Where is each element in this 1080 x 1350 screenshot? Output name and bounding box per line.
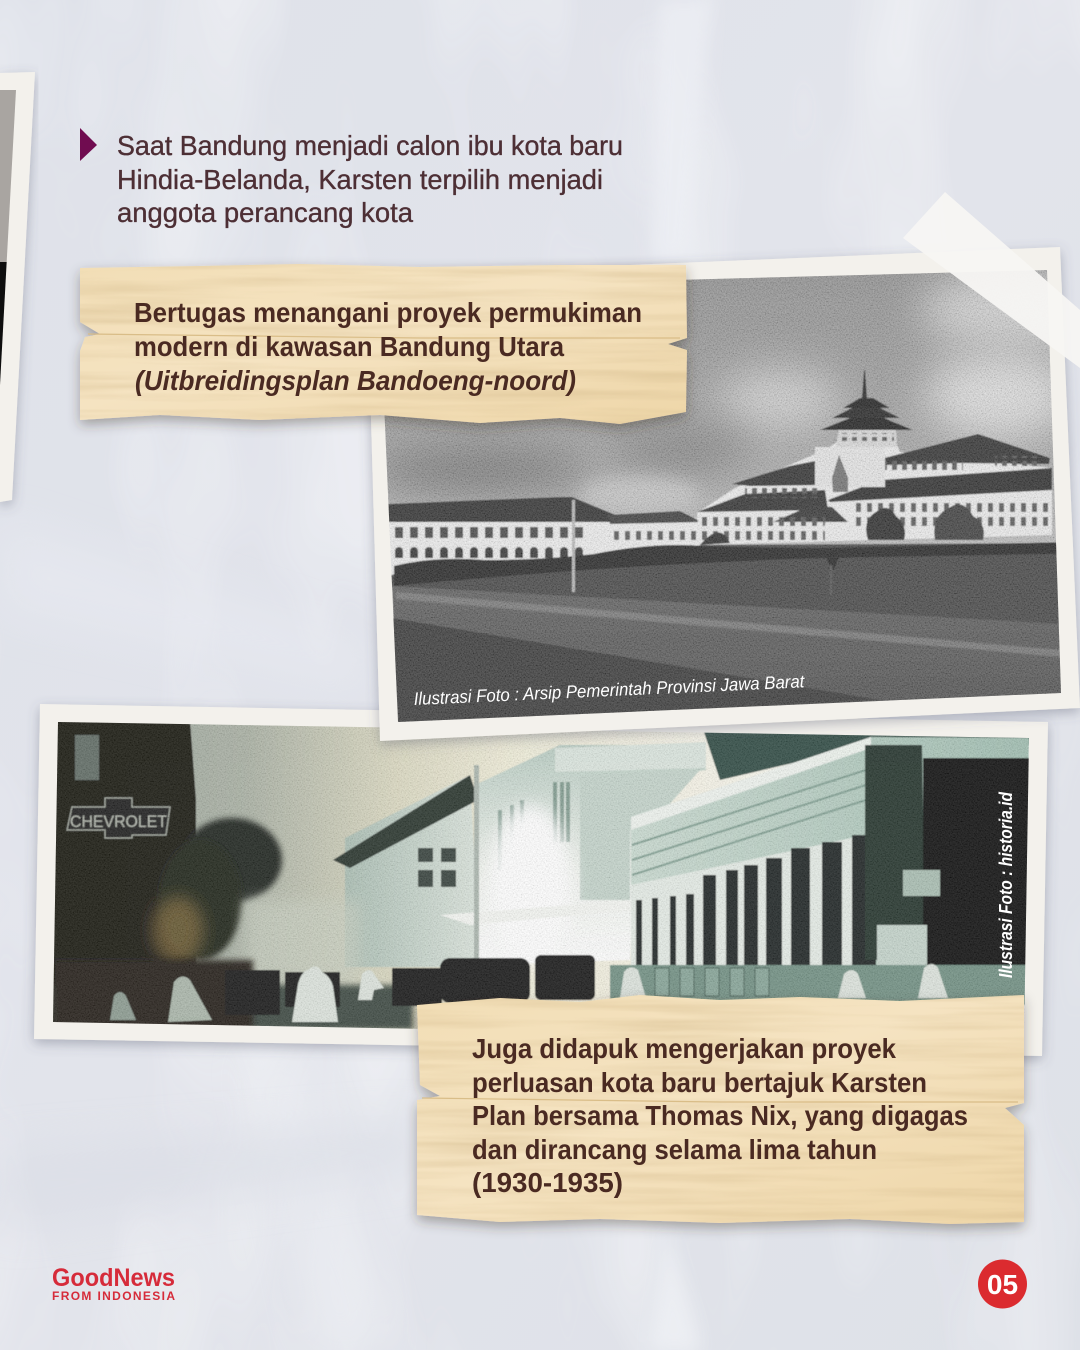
- trees: [866, 508, 905, 540]
- intro text block: anggota perancang kota: [117, 197, 414, 228]
- panel: street photo with frame: [34, 704, 1048, 1056]
- paper shape two: [417, 995, 1024, 1224]
- hedge: [394, 540, 1080, 586]
- icon: triangle bullet: [80, 128, 97, 161]
- paper text one: (Uitbreidingsplan Bandoeng-noord): [135, 365, 576, 396]
- paper text two: (1930-1935): [472, 1167, 623, 1198]
- paper text two: Juga didapuk mengerjakan proyek: [472, 1033, 897, 1064]
- photo frame: street: [34, 704, 1048, 1056]
- intro text block: [117, 130, 623, 228]
- paper text two: Plan bersama Thomas Nix, yang digagas: [472, 1100, 968, 1131]
- photo: Gedung Sate building: [370, 260, 1080, 730]
- photo: colonial street with Chevrolet sign: [50, 715, 1035, 1045]
- logo: GoodNews from Indonesia: [52, 1264, 175, 1303]
- main building: [697, 440, 1052, 545]
- logo: GoodNews from Indonesia: FROM INDONESIA: [52, 1289, 175, 1303]
- paper text two: dan dirancang selama lima tahun: [472, 1134, 877, 1165]
- lawn and road: [390, 543, 1062, 625]
- paper text one: Bertugas menangani proyek permukiman: [134, 297, 642, 328]
- intro text block: Hindia-Belanda, Karsten terpilih menjadi: [117, 164, 603, 195]
- tape strip: [903, 192, 1080, 368]
- page number badge: 05: [987, 1269, 1018, 1300]
- tower: [815, 370, 913, 492]
- paper text one: modern di kawasan Bandung Utara: [134, 331, 565, 362]
- panel: Gedung Sate photo with frame: [367, 247, 1080, 741]
- intro text block: Saat Bandung menjadi calon ibu kota baru: [117, 130, 623, 161]
- photo: colonial street with Chevrolet sign: CHEVROLET: [70, 812, 167, 831]
- panel: torn paper note two: [417, 995, 1024, 1224]
- panel: torn paper note one: [80, 264, 687, 424]
- caption: Gedung Sate photo credit: Ilustrasi Foto : Arsip Pemerintah Provinsi Jawa Barat: [413, 671, 806, 709]
- logo: GoodNews from Indonesia: GoodNews: [52, 1264, 175, 1292]
- page number badge: [978, 1260, 1027, 1308]
- paper text one: [134, 297, 642, 396]
- panel: left cropped photo: [0, 72, 35, 502]
- paper text two: perluasan kota baru bertajuk Karsten: [472, 1067, 927, 1098]
- caption: street photo credit: Ilustrasi Foto : historia.id: [996, 791, 1016, 978]
- paper text two: [472, 1033, 968, 1198]
- left wing: [389, 518, 702, 576]
- paper shape one: [80, 264, 687, 424]
- photo frame: Gedung Sate: [367, 247, 1080, 741]
